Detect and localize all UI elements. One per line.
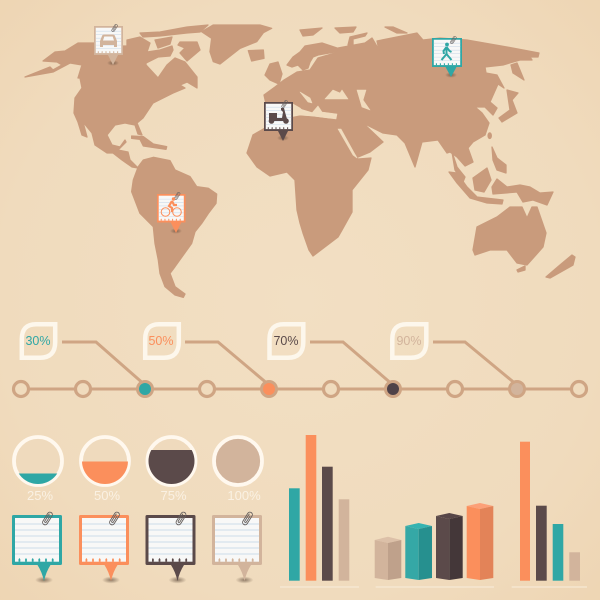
icon: car	[100, 34, 117, 47]
3D bar: tan	[375, 537, 401, 580]
gauge: 50%	[78, 437, 134, 503]
callout: 90%: 90%	[396, 334, 422, 348]
note pin: teal	[12, 511, 62, 584]
gauge: 75%: 75%	[160, 488, 187, 503]
icon: pedestrian	[442, 47, 452, 60]
map: inland seas	[293, 90, 370, 158]
world map	[25, 25, 575, 297]
map: Africa and Eurasia	[247, 27, 575, 278]
note pin: orange	[79, 511, 129, 584]
gauge: 25%	[10, 437, 66, 503]
gauge: 50%: 50%	[94, 488, 120, 503]
callout: 70%: 70%	[273, 334, 299, 348]
timeline	[14, 342, 586, 398]
note pin: tan	[212, 511, 262, 584]
active node: dark	[384, 380, 402, 398]
gauge: 100%: 100%	[227, 488, 261, 503]
active node: orange	[260, 380, 278, 398]
callout: 30%: 30%	[25, 334, 51, 348]
map pin: pedestrian	[432, 36, 462, 78]
gauge: 100%	[214, 437, 262, 503]
timeline nodes	[14, 382, 586, 396]
bar chart: right	[512, 442, 587, 587]
3D bar: dark	[436, 513, 463, 580]
active node: teal	[136, 380, 154, 398]
note pin: dark	[146, 511, 196, 584]
icon: cyclist	[161, 201, 181, 216]
map pin: cyclist	[157, 192, 186, 234]
3D bar: orange	[467, 503, 493, 580]
bar chart: 3D centre	[375, 503, 494, 587]
gauge: 25%: 25%	[27, 488, 53, 503]
gauge: 75%	[144, 437, 200, 503]
map pin: scooter	[264, 100, 293, 141]
callout: 70%	[270, 324, 303, 358]
map pin: car	[94, 24, 123, 66]
3D bar: teal	[405, 523, 432, 580]
callout: 30%	[22, 324, 55, 358]
map: North America	[25, 25, 208, 168]
callout: 90%	[392, 324, 426, 358]
callout: 50%	[145, 324, 179, 358]
bar chart: left	[280, 435, 359, 587]
connector lines	[62, 342, 517, 385]
map: South America, Greenland, Iceland, Cuba	[132, 25, 272, 297]
active node: tan	[508, 380, 526, 398]
callout: 50%: 50%	[148, 334, 174, 348]
icon: scooter	[269, 108, 289, 124]
